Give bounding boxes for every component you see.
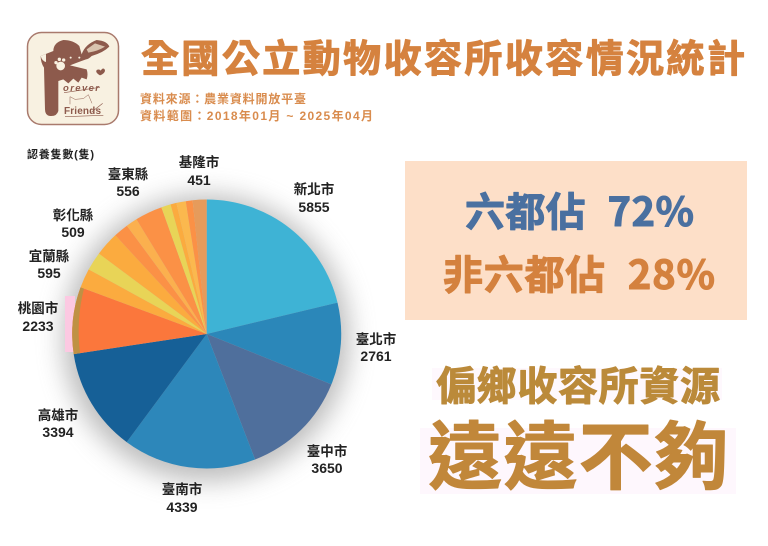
pie labels: 3394 [42,424,74,440]
pie labels: 4339 [166,499,198,515]
pie labels [18,154,396,515]
pie shadow [63,195,349,481]
title: 全國公立動物收容所收容情況統計 [141,28,745,83]
pie chart: adoption count by county [72,199,341,468]
logo: Forever Friends [28,32,118,124]
pie labels: 臺東縣 [108,166,149,182]
pie labels: 新北市 [294,181,334,197]
six municipalities 72%: 六都佔 72% [465,180,694,238]
pale background behind far-from-enough [420,428,736,494]
pie labels: 509 [61,224,85,240]
pie labels: 高雄市 [38,407,78,423]
pie labels: 宜蘭縣 [29,248,70,264]
pie labels: 彰化縣 [53,207,94,223]
data source text: 資料範圍：2018年01月 ~ 2025年04月 [140,108,373,123]
pie labels: 451 [187,172,211,188]
logo: Forever Friends: orever [63,83,100,94]
data source text: 資料來源：農業資料開放平臺 [140,91,306,106]
pie labels: 2761 [360,348,392,364]
pie labels: 基隆市 [179,154,219,170]
callout line: rural shelter resources: 偏鄉收容所資源 [436,354,720,412]
data source text [140,91,373,123]
pie labels: 臺中市 [307,443,347,459]
chart unit label: 認養隻數(隻) [27,147,94,161]
pale background behind rural line [432,368,722,400]
pie labels: 臺北市 [356,331,396,347]
pie labels: 3650 [311,460,343,476]
pink fringe beside pie [65,296,75,352]
pie labels: 臺南市 [162,481,202,497]
pie labels: 5855 [298,199,330,215]
pie labels: 556 [116,183,140,199]
pie labels: 桃園市 [18,300,58,316]
non six municipalities 28%: 非六都佔 28% [443,243,715,301]
pie labels: 2233 [22,318,54,334]
callout: far from enough: 遠遠不夠 [428,398,728,505]
panel: six-municipality share [405,161,747,320]
logo: Forever Friends: Friends [64,106,101,117]
pie labels: 595 [37,265,61,281]
